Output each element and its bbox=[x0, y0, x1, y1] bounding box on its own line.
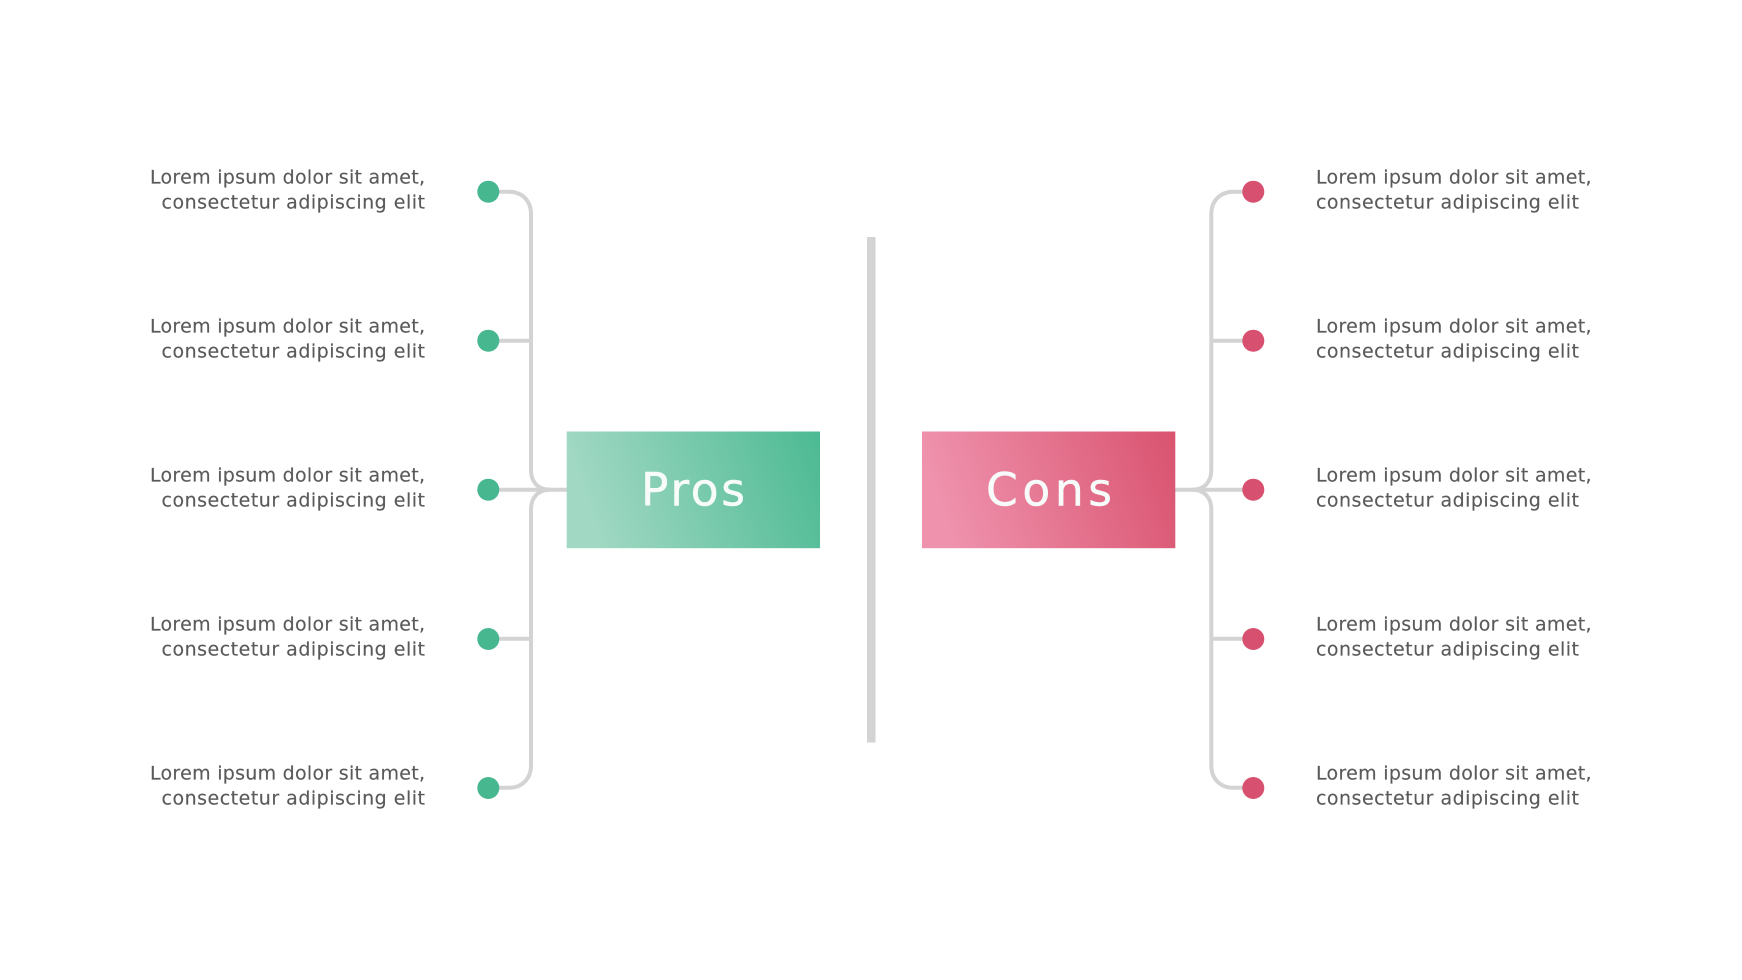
pros item 3: consectetur adipiscing elit bbox=[162, 490, 425, 512]
cons item 3 bbox=[1242, 465, 1592, 512]
connector tree: pros bbox=[495, 192, 568, 788]
cons item 4 bbox=[1242, 614, 1592, 661]
cons item 2 bbox=[1242, 316, 1592, 363]
cons item 5: Lorem ipsum dolor sit amet, bbox=[1316, 763, 1592, 785]
cons item 1: consectetur adipiscing elit bbox=[1316, 192, 1579, 214]
cons item 1 bbox=[1242, 167, 1592, 214]
pros item 2: Lorem ipsum dolor sit amet, bbox=[150, 316, 425, 338]
pros item 2: consectetur adipiscing elit bbox=[162, 341, 425, 363]
pros item 4: Lorem ipsum dolor sit amet, bbox=[150, 614, 425, 636]
pros item 1: consectetur adipiscing elit bbox=[162, 192, 425, 214]
cons item 5: consectetur adipiscing elit bbox=[1316, 788, 1579, 810]
pros item 3 bbox=[150, 465, 499, 512]
pros item 4 bbox=[150, 614, 499, 661]
pros item 5: consectetur adipiscing elit bbox=[162, 788, 425, 810]
cons heading box bbox=[922, 432, 1175, 548]
pros item 5: Lorem ipsum dolor sit amet, bbox=[150, 763, 425, 785]
cons item 2: Lorem ipsum dolor sit amet, bbox=[1316, 316, 1592, 338]
cons item 4: consectetur adipiscing elit bbox=[1316, 639, 1579, 661]
connector tree: cons bbox=[1174, 192, 1247, 788]
panel: pros bbox=[150, 167, 820, 810]
pros item 3: Lorem ipsum dolor sit amet, bbox=[150, 465, 425, 487]
cons item 3: Lorem ipsum dolor sit amet, bbox=[1316, 465, 1592, 487]
pros item 4: consectetur adipiscing elit bbox=[162, 639, 425, 661]
cons item 2: consectetur adipiscing elit bbox=[1316, 341, 1579, 363]
pros item 5 bbox=[150, 763, 499, 810]
cons item 4: Lorem ipsum dolor sit amet, bbox=[1316, 614, 1592, 636]
pros item 1 bbox=[150, 167, 499, 214]
cons item 5 bbox=[1242, 763, 1592, 810]
pros item 2 bbox=[150, 316, 499, 363]
panel: cons bbox=[922, 167, 1592, 810]
centre divider bbox=[867, 237, 876, 742]
pros heading box: Pros bbox=[641, 464, 745, 516]
cons heading box: Cons bbox=[986, 464, 1112, 516]
cons item 3: consectetur adipiscing elit bbox=[1316, 490, 1579, 512]
cons item 1: Lorem ipsum dolor sit amet, bbox=[1316, 167, 1592, 189]
pros heading box bbox=[567, 432, 820, 548]
pros item 1: Lorem ipsum dolor sit amet, bbox=[150, 167, 425, 189]
